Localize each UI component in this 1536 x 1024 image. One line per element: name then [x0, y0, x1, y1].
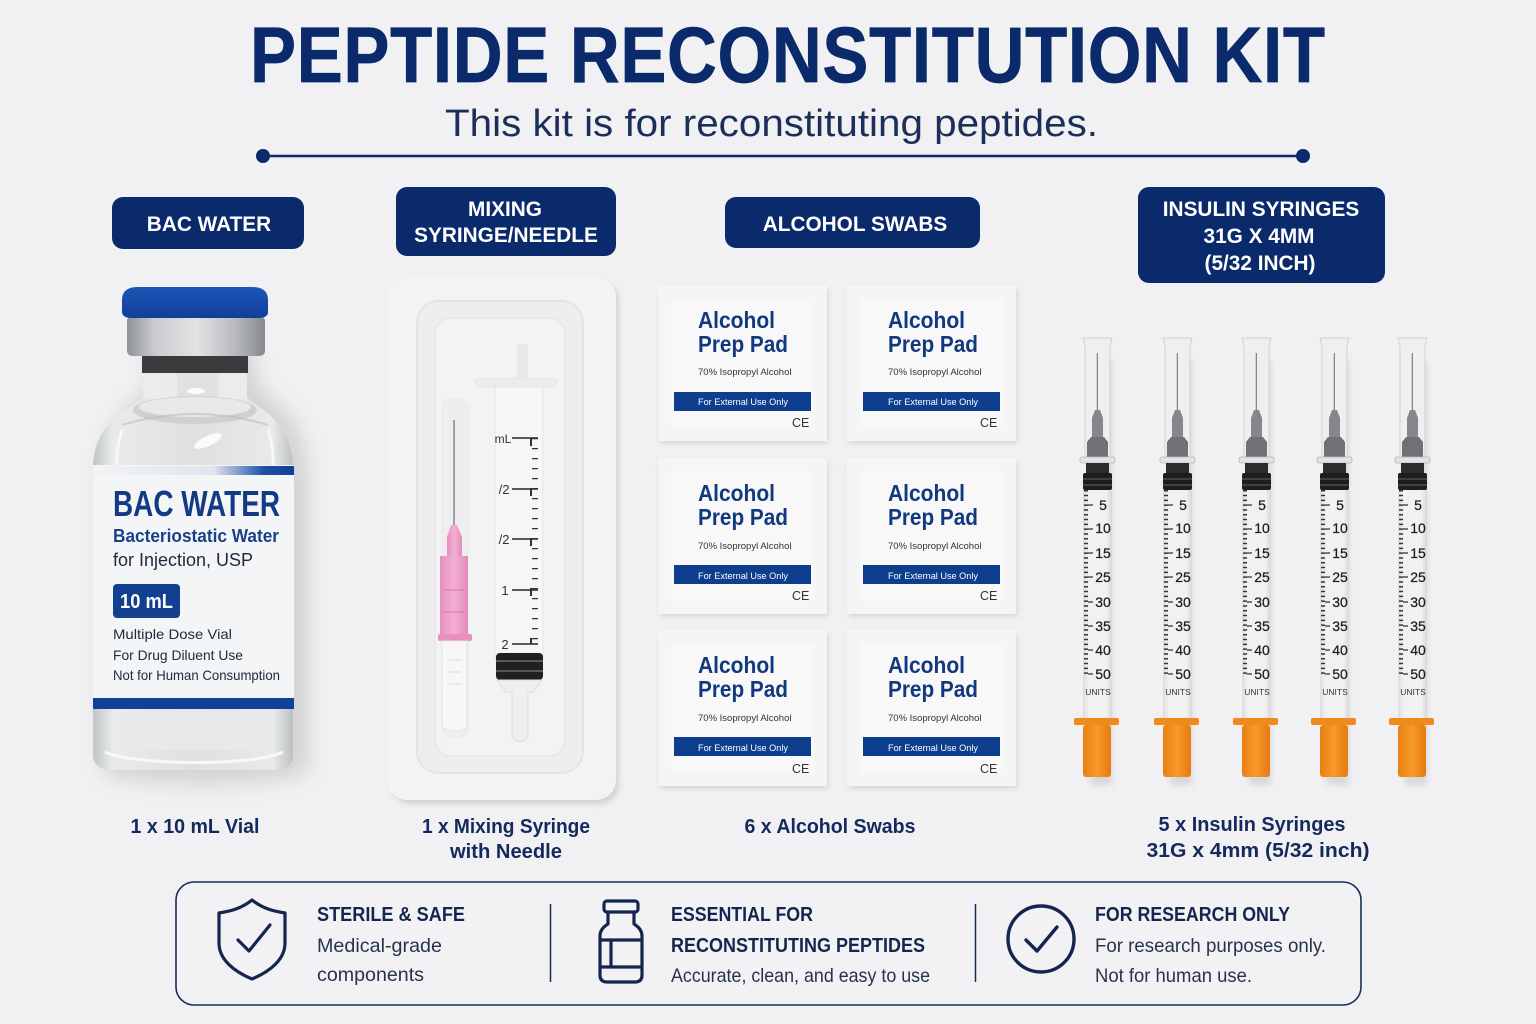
- insulin syringe 5: UNITS: [1400, 687, 1426, 697]
- swab 5: [658, 630, 828, 788]
- insulin syringe 3: 40: [1254, 642, 1270, 658]
- blister backing: [391, 281, 619, 804]
- insulin syringe 2: UNITS: [1165, 687, 1191, 697]
- benefit: research only: [1095, 904, 1326, 987]
- swab 6: Alcohol: [888, 652, 965, 678]
- insulin syringe 3: [1233, 338, 1278, 785]
- BAC water vial: BAC WATER: [113, 483, 280, 524]
- insulin syringe 4: [1311, 338, 1356, 785]
- icon: vial: [600, 901, 642, 982]
- mixing syringe: mL: [495, 432, 512, 446]
- vial blue cap: [122, 287, 268, 318]
- insulin syringe 1: 35: [1095, 618, 1111, 634]
- insulin syringe 4: 50: [1332, 666, 1348, 682]
- heading: insulin syringes: [1138, 187, 1385, 283]
- insulin syringe 5: [1389, 338, 1434, 785]
- insulin syringe 2: 30: [1175, 594, 1191, 610]
- swab 2: Prep Pad: [888, 331, 978, 357]
- vial volume badge: [113, 584, 180, 618]
- swab 6: [847, 630, 1017, 788]
- vial label: [93, 465, 294, 709]
- heading: mixing syringe/needle: MIXING: [468, 198, 542, 221]
- insulin syringe 4: 5: [1336, 497, 1344, 513]
- insulin syringe 2: 35: [1175, 618, 1191, 634]
- insulin syringe 1: 50: [1095, 666, 1111, 682]
- insulin syringe 5: 40: [1410, 642, 1426, 658]
- icon: circle check: [1008, 906, 1074, 972]
- insulin syringe 1: 30: [1095, 594, 1111, 610]
- caption: insulin syringes: [1146, 814, 1370, 862]
- icon: shield check: [219, 900, 285, 979]
- insulin syringe 3: 5: [1258, 497, 1266, 513]
- insulin syringe 5: 10: [1410, 520, 1426, 536]
- swab 3: CE: [792, 589, 809, 603]
- swab 2: Alcohol: [888, 307, 965, 333]
- insulin syringe 3: 15: [1254, 545, 1270, 561]
- mixing syringe: 2: [501, 637, 509, 652]
- heading: insulin syringes: (5/32 INCH): [1205, 252, 1315, 275]
- heading: mixing syringe/needle: [396, 187, 616, 256]
- mixing syringe: 1: [501, 583, 509, 598]
- insulin syringe 4: UNITS: [1322, 687, 1348, 697]
- insulin syringe 4: 15: [1332, 545, 1348, 561]
- BAC water vial: For Drug Diluent Use: [113, 647, 243, 663]
- benefit: essential: ESSENTIAL FOR: [671, 904, 813, 926]
- insulin syringe 1: 5: [1099, 497, 1107, 513]
- insulin syringe 5: 5: [1414, 497, 1422, 513]
- BAC water vial: Not for Human Consumption: [113, 667, 280, 683]
- mixing syringe: [475, 344, 557, 742]
- benefit: research only: FOR RESEARCH ONLY: [1095, 904, 1291, 926]
- insulin syringe 2: 15: [1175, 545, 1191, 561]
- swab 4: For External Use Only: [888, 571, 978, 582]
- insulin syringe 5: 35: [1410, 618, 1426, 634]
- insulin syringe 4: 35: [1332, 618, 1348, 634]
- heading: insulin syringes: 31G X 4MM: [1204, 225, 1314, 248]
- benefit: essential: RECONSTITUTING PEPTIDES: [671, 935, 925, 957]
- caption: vial: 1 x 10 mL Vial: [130, 816, 260, 838]
- swab 4: Alcohol: [888, 480, 965, 506]
- swab 5: For External Use Only: [698, 743, 788, 754]
- insulin syringe 2: 25: [1175, 569, 1191, 585]
- BAC water vial: [93, 287, 308, 784]
- swab 2: For External Use Only: [888, 397, 978, 408]
- insulin syringe 1: UNITS: [1085, 687, 1111, 697]
- insulin syringe 2: 50: [1175, 666, 1191, 682]
- insulin syringe 4: 40: [1332, 642, 1348, 658]
- mixing syringe: /2: [499, 532, 509, 547]
- insulin syringe 5: 30: [1410, 594, 1426, 610]
- swab 6: CE: [980, 762, 997, 776]
- insulin syringe 1: 25: [1095, 569, 1111, 585]
- vial neck and crimp: [142, 354, 248, 373]
- swab 1: For External Use Only: [698, 397, 788, 408]
- swab 4: CE: [980, 589, 997, 603]
- benefit: sterile and safe: Medical-grade: [317, 935, 442, 957]
- insulin syringe 3: 30: [1254, 594, 1270, 610]
- swab 5: Alcohol: [698, 652, 775, 678]
- benefit: research only: Not for human use.: [1095, 965, 1252, 987]
- benefit: research only: For research purposes only.: [1095, 935, 1326, 957]
- hypodermic needle: [438, 398, 472, 738]
- swab 1: Prep Pad: [698, 331, 788, 357]
- insulin syringe 5: 25: [1410, 569, 1426, 585]
- caption: insulin syringes: 31G x 4mm (5/32 inch): [1146, 840, 1370, 862]
- heading: mixing syringe/needle: SYRINGE/NEEDLE: [414, 224, 598, 247]
- benefit: essential: [671, 904, 930, 987]
- swab 3: Prep Pad: [698, 504, 788, 530]
- swab 1: Alcohol: [698, 307, 775, 333]
- insulin syringe 1: 40: [1095, 642, 1111, 658]
- insulin syringe 2: 10: [1175, 520, 1191, 536]
- mixing syringe blister pack: [387, 277, 619, 804]
- caption: insulin syringes: 5 x Insulin Syringes: [1158, 814, 1346, 836]
- swab 2: CE: [980, 416, 997, 430]
- alcohol swabs grid: [658, 285, 1017, 788]
- benefit: sterile and safe: components: [317, 964, 424, 986]
- swab 4: [847, 458, 1017, 616]
- vial glass body: [93, 373, 293, 770]
- swab 3: For External Use Only: [698, 571, 788, 582]
- heading: alcohol swabs: [725, 197, 980, 248]
- benefit: sterile and safe: STERILE & SAFE: [317, 904, 465, 926]
- insulin syringe 2: 40: [1175, 642, 1191, 658]
- insulin syringe 1: [1074, 338, 1119, 785]
- insulin syringe 2: 5: [1179, 497, 1187, 513]
- swab 1: CE: [792, 416, 809, 430]
- insulin syringe 1: 10: [1095, 520, 1111, 536]
- caption: swabs: 6 x Alcohol Swabs: [744, 816, 916, 838]
- swab 6: 70% Isopropyl Alcohol: [888, 713, 981, 724]
- swab 2: [847, 285, 1017, 443]
- swab 3: Alcohol: [698, 480, 775, 506]
- caption: mixing syringe: with Needle: [449, 841, 562, 863]
- vial volume badge: 10 mL: [120, 591, 173, 613]
- heading: alcohol swabs: ALCOHOL SWABS: [763, 213, 947, 236]
- caption: mixing syringe: [422, 816, 590, 863]
- swab 4: Prep Pad: [888, 504, 978, 530]
- insulin syringe 4: 10: [1332, 520, 1348, 536]
- swab 3: 70% Isopropyl Alcohol: [698, 541, 791, 552]
- insulin syringe 3: 10: [1254, 520, 1270, 536]
- blister tray: [417, 301, 583, 773]
- swab 5: CE: [792, 762, 809, 776]
- insulin syringe 3: UNITS: [1244, 687, 1270, 697]
- insulin syringe 3: 35: [1254, 618, 1270, 634]
- panel: key benefits: [176, 882, 1361, 1005]
- swab 5: 70% Isopropyl Alcohol: [698, 713, 791, 724]
- swab 6: Prep Pad: [888, 676, 978, 702]
- swab 1: [658, 285, 828, 443]
- insulin syringe 1: 15: [1095, 545, 1111, 561]
- title divider with end dots: [256, 149, 1310, 163]
- insulin syringe 5: 15: [1410, 545, 1426, 561]
- vial shadow: [103, 340, 308, 784]
- swab 1: 70% Isopropyl Alcohol: [698, 367, 791, 378]
- benefit: essential: Accurate, clean, and easy to use: [671, 965, 930, 987]
- heading: insulin syringes: INSULIN SYRINGES: [1163, 198, 1359, 221]
- BAC water vial: for Injection, USP: [113, 550, 253, 570]
- swab 2: 70% Isopropyl Alcohol: [888, 367, 981, 378]
- subtitle: This kit is for reconstituting peptides.: [445, 103, 1098, 145]
- insulin syringe 3: 25: [1254, 569, 1270, 585]
- heading: BAC water: [112, 197, 304, 249]
- swab 5: Prep Pad: [698, 676, 788, 702]
- caption: mixing syringe: 1 x Mixing Syringe: [422, 816, 590, 838]
- insulin syringe 4: 25: [1332, 569, 1348, 585]
- insulin syringe 3: 50: [1254, 666, 1270, 682]
- swab 4: 70% Isopropyl Alcohol: [888, 541, 981, 552]
- insulin syringe 2: [1154, 338, 1199, 785]
- insulin syringe 5: 50: [1410, 666, 1426, 682]
- benefit: sterile and safe: [317, 904, 465, 986]
- heading: BAC water: BAC WATER: [147, 213, 271, 236]
- insulin syringes row: [1074, 338, 1434, 785]
- swab 3: [658, 458, 828, 616]
- mixing syringe: /2: [499, 482, 509, 497]
- title: PEPTIDE RECONSTITUTION KIT: [250, 11, 1325, 99]
- swab 6: For External Use Only: [888, 743, 978, 754]
- BAC water vial: Bacteriostatic Water: [113, 526, 279, 546]
- insulin syringe 4: 30: [1332, 594, 1348, 610]
- BAC water vial: Multiple Dose Vial: [113, 626, 232, 642]
